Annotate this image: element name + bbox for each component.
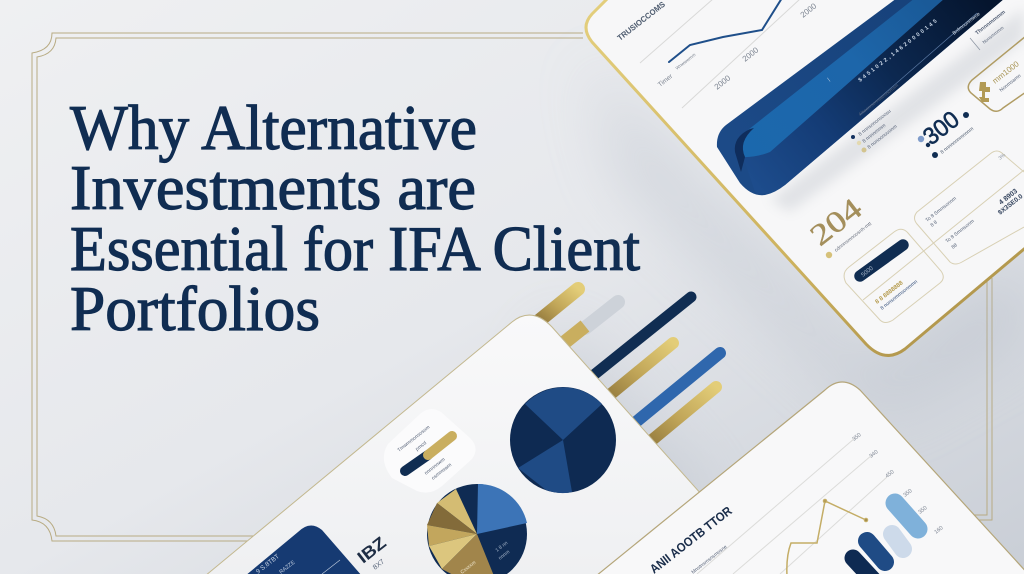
slab text: $ 4 5 1 0 2 2 , 1 4 6 2 0 0 0 0 1 4 5 xyxy=(858,19,938,84)
3D blue slab bar xyxy=(717,0,1024,212)
info box right: 3% xyxy=(998,152,1007,162)
card body xyxy=(596,382,1024,574)
title: Why Alternative xyxy=(70,92,477,163)
line chart xyxy=(669,0,782,62)
chart axis labels xyxy=(657,1,819,92)
card body xyxy=(586,0,1024,355)
legend list: 8 nnnnmmm xyxy=(862,123,887,145)
title xyxy=(70,92,640,344)
navy pill xyxy=(860,245,903,276)
chart axis labels: Timer xyxy=(657,72,675,89)
chart axis labels: 2000 xyxy=(799,1,819,20)
pie chart: gold and blue: nnnm xyxy=(498,549,511,562)
panel: top right dashboard card xyxy=(586,0,1024,355)
info box right: 88 xyxy=(951,242,959,251)
axis labels: 350 xyxy=(852,432,862,443)
axis labels: 350 xyxy=(903,488,913,499)
info box lower left: 5000 xyxy=(861,265,875,279)
stat 204 xyxy=(804,192,873,258)
stat 300: 8 nnnnnnnmnnnm xyxy=(940,126,975,156)
axis labels xyxy=(852,432,944,536)
info box right: 4 8903 xyxy=(998,188,1019,207)
info box lower left: 8 8 8888888 xyxy=(875,280,905,306)
title: Portfolios xyxy=(70,273,320,344)
small progress card: pmcd xyxy=(415,440,428,453)
title: Essential for IFA Client xyxy=(70,213,640,284)
gold badge top right: mm1000 xyxy=(991,59,1021,86)
decorative shadows behind cards xyxy=(520,60,1024,540)
decorative bars behind centre card xyxy=(535,289,720,450)
small text top right corner xyxy=(970,9,1007,50)
3D blue slab bar: Bnfmnunmwoe xyxy=(952,11,982,37)
rounded bars xyxy=(853,503,918,574)
small text top right corner: Nonsmmmm xyxy=(982,25,1005,45)
panel: centre card with pie charts xyxy=(205,315,760,574)
legend list: Alsaonrsonnswmnomsm xyxy=(858,83,899,117)
legend list xyxy=(851,83,899,152)
axis labels: 450 xyxy=(885,469,895,480)
stat 300: 300 xyxy=(918,106,965,151)
legend list: 8 nnnsnnonsoosu xyxy=(858,108,893,138)
small progress card xyxy=(384,409,476,493)
chart axis labels: 2000 xyxy=(713,73,733,92)
stat 204: 204 xyxy=(804,192,868,253)
legend list: 8 nonoonuvonm xyxy=(867,124,899,151)
chart heading: ANII AOOTB TTOR xyxy=(647,504,735,574)
stat 204: cdnnnsmnoosnh-mtt xyxy=(834,221,873,254)
small progress card: Tmwmmonsosom xyxy=(397,425,431,454)
info box right: $X3SE0.0 xyxy=(997,193,1024,217)
gold badge top right xyxy=(968,36,1024,111)
navy info block xyxy=(245,525,362,574)
chart axis labels: 2000 xyxy=(741,45,761,64)
info box lower left: 8 nonsnmmsonmmn xyxy=(880,279,919,312)
pie chart: navy and blue xyxy=(510,387,616,493)
info box lower left xyxy=(844,229,943,322)
pie chart: gold and blue xyxy=(427,484,527,574)
info box right: 8 8 xyxy=(930,219,939,229)
axis labels: 160 xyxy=(934,525,944,536)
stat label IBZ: 8X7 xyxy=(372,558,386,572)
grid lines xyxy=(697,438,887,574)
chart grid lines xyxy=(640,0,800,108)
card body xyxy=(205,315,760,574)
axis labels: 350 xyxy=(918,505,928,516)
axis labels: 340 xyxy=(869,449,879,460)
small progress card: nnnnnnwm xyxy=(424,457,447,477)
info box right: To 8 Smmsonnm xyxy=(925,196,958,224)
small progress card: osmmswm xyxy=(431,462,453,482)
pie chart: gold and blue: 1 8 nn xyxy=(495,540,509,554)
gold trend line xyxy=(787,500,868,574)
3D blue slab bar: | xyxy=(827,77,831,83)
panel: lower right chart card xyxy=(596,382,1024,574)
title: Investments are xyxy=(70,152,476,223)
chart axis labels: Wnwwwmm xyxy=(675,52,697,71)
gold badge top right: Nonmsamn xyxy=(999,73,1023,94)
info box right: To 8 Smmsonm xyxy=(945,218,976,245)
small text top right corner: Thnnnmmmm xyxy=(975,9,1007,37)
stat label IBZ: IBZ xyxy=(354,533,390,567)
info box right xyxy=(863,151,1024,300)
